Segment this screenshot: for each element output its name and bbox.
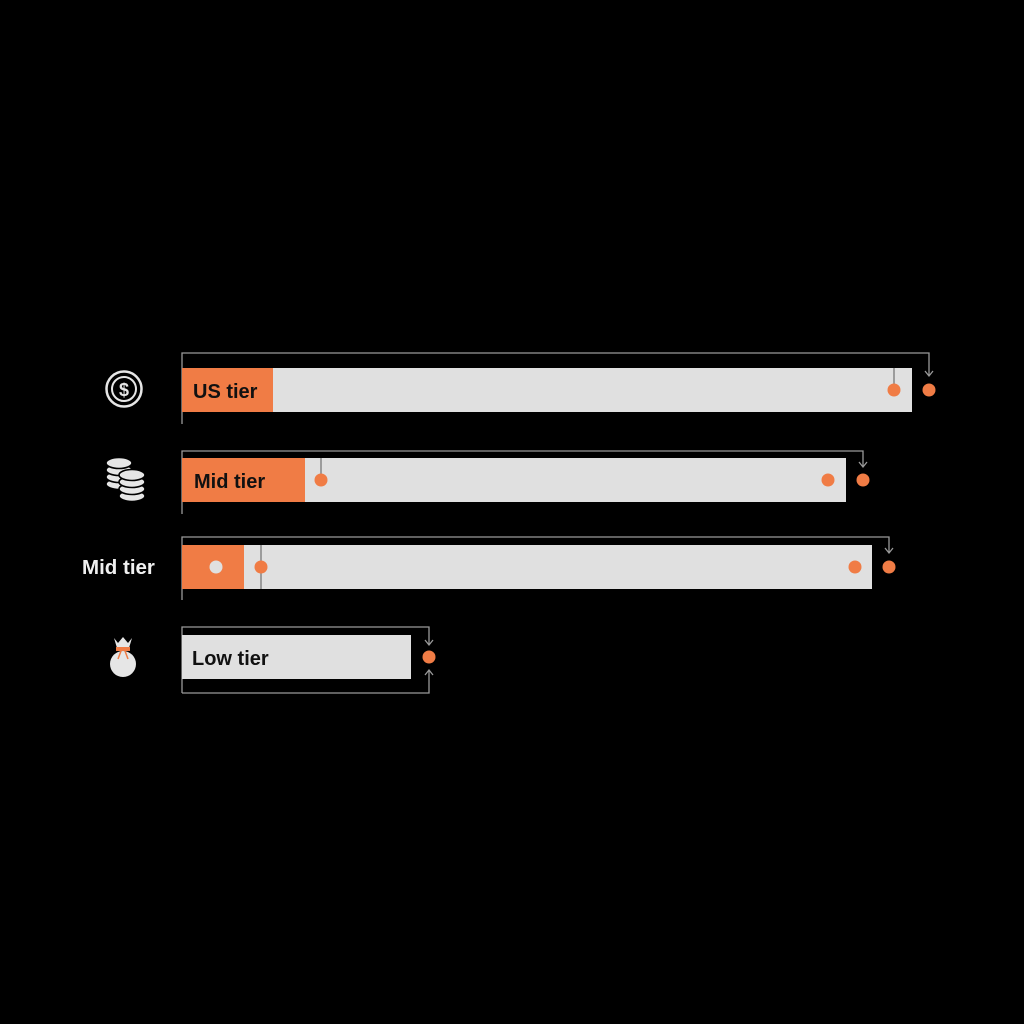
icon: dollar coin: $ (119, 380, 129, 400)
marker (422, 650, 436, 664)
row: Mid tier (coins) (106, 451, 870, 514)
label: Mid tier (82, 556, 155, 579)
markers (314, 458, 870, 486)
bar (182, 635, 411, 679)
icon: dollar coin (106, 372, 142, 406)
icon: coin stacks (106, 458, 145, 502)
bar (182, 458, 846, 502)
bracket arrow (182, 451, 867, 514)
bracket arrow (182, 353, 933, 424)
bar: Mid tier (194, 471, 265, 493)
bar: Low tier (192, 648, 269, 670)
bar: US tier (193, 381, 258, 403)
bar (182, 545, 872, 589)
markers (888, 368, 936, 396)
row: Low tier (110, 627, 436, 693)
bar (182, 368, 912, 412)
icon: money bag (110, 637, 136, 677)
row: US tier (106, 353, 936, 424)
bracket arrows (182, 627, 433, 693)
bracket arrow (182, 537, 893, 600)
row: Mid tier (text label) (82, 537, 896, 600)
markers (210, 545, 896, 589)
